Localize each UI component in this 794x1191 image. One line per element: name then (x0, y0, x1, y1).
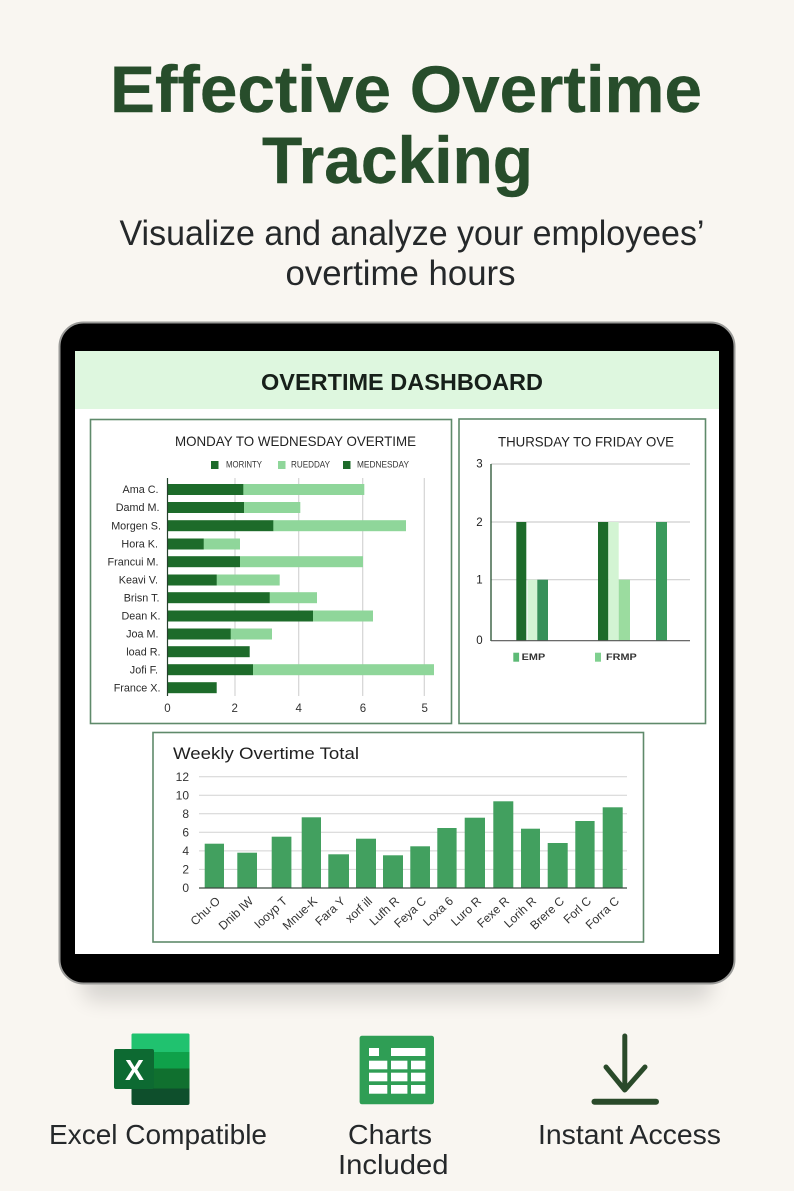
employee labels: Morgen S. (111, 520, 161, 532)
employee labels (108, 484, 161, 694)
rotated employee labels (188, 894, 622, 933)
y axis labels: 2 (476, 517, 483, 529)
legend (211, 460, 409, 470)
y axis labels: 0 (182, 881, 189, 895)
panel: weekly overtime total (153, 732, 644, 942)
dashboard header: OVERTIME DASHBOARD (261, 369, 543, 395)
tablet screen (75, 351, 719, 954)
panel: Monday to Wednesday overtime (90, 420, 452, 724)
y axis labels (176, 770, 189, 895)
panel: Thursday to Friday overtime (459, 419, 706, 724)
label: charts included (338, 1119, 448, 1180)
employee labels: Hora K. (121, 539, 158, 551)
y axis labels: 3 (476, 458, 483, 470)
x axis labels: 5 (421, 703, 428, 715)
employee labels: Joa M. (126, 629, 158, 641)
chart title: Weekly Overtime Total (173, 744, 359, 763)
dashboard header (75, 351, 719, 409)
icon: spreadsheet (360, 1036, 434, 1104)
y axis labels: 8 (182, 807, 189, 821)
label: charts included: Charts (348, 1119, 432, 1150)
legend (513, 652, 637, 663)
legend: MORINTY (226, 460, 262, 470)
rotated employee labels: Chu·O (188, 894, 223, 928)
y axis labels: 2 (182, 862, 189, 876)
bars (205, 801, 623, 888)
employee labels: Ama C. (122, 484, 158, 496)
rotated employee labels: Fara Y (312, 894, 348, 929)
stacked bars (168, 484, 434, 693)
y axis labels: 10 (176, 788, 189, 802)
rotated employee labels: Lufh R (367, 894, 402, 928)
x axis labels: 4 (295, 703, 302, 715)
x axis labels (164, 703, 428, 715)
x axis labels: 6 (360, 703, 366, 715)
tablet dashboard (60, 322, 734, 984)
employee labels: Dean K. (121, 611, 160, 623)
rotated employee labels: Loxa 6 (420, 894, 456, 929)
rotated employee labels: Forl C (561, 894, 594, 926)
x axis labels: 0 (164, 703, 171, 715)
icon: excel (114, 1034, 190, 1105)
y axis labels: 0 (476, 635, 483, 647)
rotated employee labels: Fexe R (474, 894, 512, 931)
label: excel compatible: Excel Compatible (49, 1119, 267, 1150)
chart title: MONDAY TO WEDNESDAY OVERTIME (175, 433, 416, 449)
y axis labels: 6 (182, 826, 189, 840)
employee labels: Keavi V. (119, 575, 158, 587)
legend: EMP (522, 652, 546, 663)
icon: excel: X (125, 1055, 145, 1087)
title: Effective Overtime (110, 52, 702, 126)
rotated employee labels: Dnib lW (216, 894, 257, 933)
rotated employee labels: xorf ill (343, 894, 375, 926)
subtitle: Visualize and analyze your employees’ (120, 214, 704, 253)
tablet frame (60, 322, 734, 984)
employee labels: France X. (114, 682, 160, 694)
tablet shadow (82, 955, 712, 1001)
title: Tracking (262, 123, 533, 197)
y axis labels: 1 (476, 574, 483, 586)
x axis labels: 2 (231, 703, 238, 715)
y axis labels (476, 458, 483, 647)
employee labels: Brisn T. (124, 592, 160, 604)
legend: RUEDDAY (291, 460, 330, 470)
rotated employee labels: Lorih R (501, 894, 539, 931)
employee labels: Jofi F. (130, 664, 158, 676)
employee labels: Francui M. (108, 556, 158, 568)
y axis labels: 4 (182, 844, 189, 858)
legend: MEDNESDAY (357, 460, 409, 470)
grouped bars (516, 522, 667, 641)
label: charts included: Included (338, 1149, 448, 1180)
rotated employee labels: Brere C (527, 894, 567, 932)
title (110, 52, 702, 197)
rotated employee labels: Mnue-K (280, 894, 320, 933)
subtitle (120, 214, 704, 293)
rotated employee labels: Forra C (583, 894, 622, 932)
employee labels: Damd M. (116, 502, 160, 514)
legend: FRMP (606, 652, 637, 663)
chart title: THURSDAY TO FRIDAY OVE (498, 434, 674, 450)
subtitle: overtime hours (286, 254, 516, 293)
rotated employee labels: Luro R (448, 894, 484, 929)
rotated employee labels: Iooyp T (251, 894, 291, 931)
label: instant access: Instant Access (538, 1119, 721, 1150)
icon: download arrow (594, 1036, 656, 1102)
rotated employee labels: Feya C (391, 894, 429, 931)
y axis labels: 12 (176, 770, 189, 784)
employee labels: load R. (126, 646, 160, 658)
